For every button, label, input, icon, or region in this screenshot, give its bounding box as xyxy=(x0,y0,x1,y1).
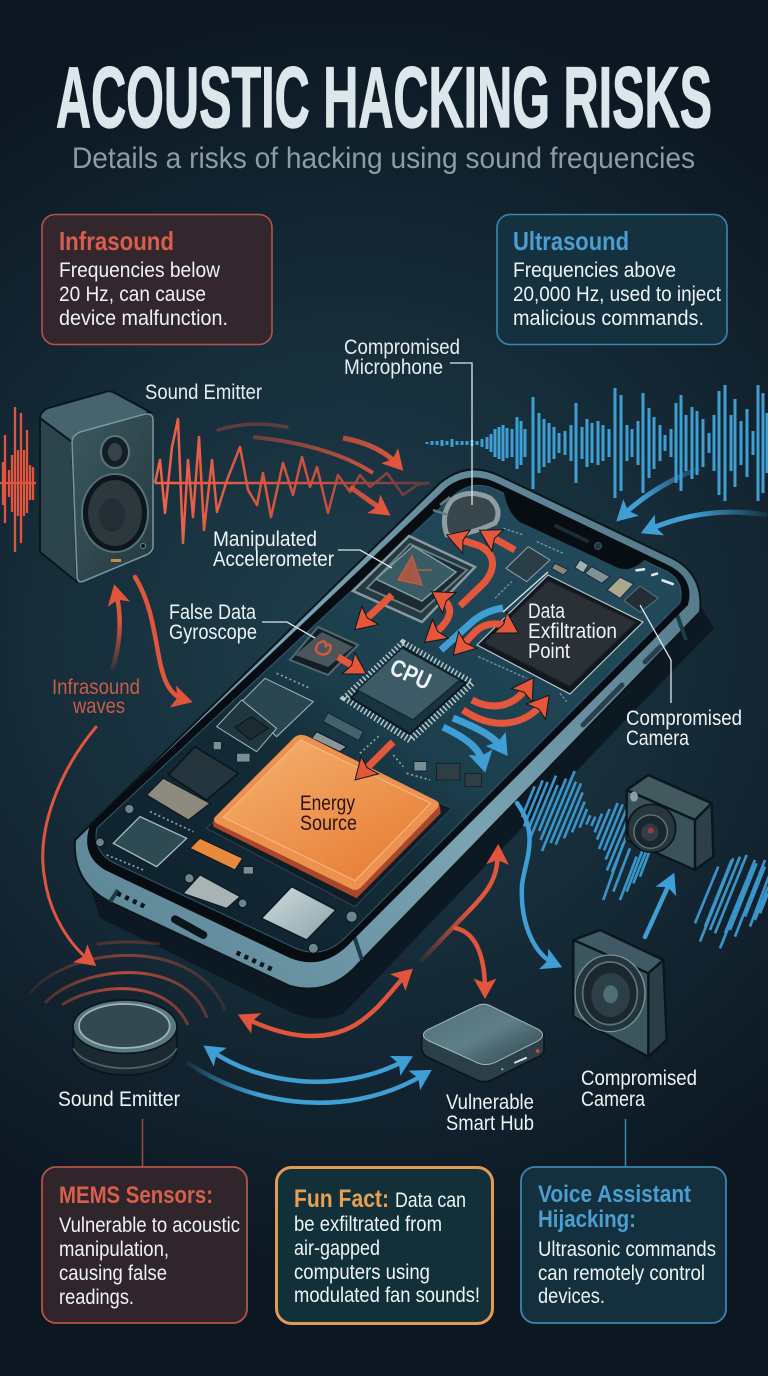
label: sound emitter puck: Sound Emitter xyxy=(58,1087,180,1111)
small chip xyxy=(506,547,550,582)
fun fact text xyxy=(294,1188,480,1307)
manipulated accelerometer chip xyxy=(353,536,475,622)
label: vulnerable smart hub xyxy=(446,1090,534,1135)
data exfiltration label: Point xyxy=(528,639,570,663)
subtitle: Details a risks of hacking using sound frequencies xyxy=(72,142,695,175)
module with chip xyxy=(217,700,277,752)
fun fact heading: Fun Fact: xyxy=(294,1185,389,1213)
side band notches xyxy=(110,612,686,960)
upper module xyxy=(240,678,313,737)
label: compromised camera on phone xyxy=(626,605,742,750)
data exfiltration label: Data xyxy=(528,599,565,623)
traces xyxy=(478,528,567,702)
data exfiltration label xyxy=(528,599,617,663)
label: compromised microphone xyxy=(344,335,472,505)
speaker top and side xyxy=(40,391,150,442)
panel: infrasound xyxy=(42,214,272,344)
infrasound waves label: waves xyxy=(72,695,125,718)
voice assistant heading: Voice Assistant xyxy=(538,1181,691,1208)
label: compromised microphone: Compromised xyxy=(344,335,460,359)
label: manipulated accelerometer xyxy=(213,527,392,571)
volume buttons xyxy=(583,647,660,725)
mems text: causing false xyxy=(59,1261,167,1285)
orange chip xyxy=(190,838,243,870)
energy source label xyxy=(300,791,357,835)
notch xyxy=(503,486,648,569)
speaker front xyxy=(72,414,153,582)
phone metal body xyxy=(75,469,700,989)
earpiece and front camera xyxy=(556,526,602,550)
label: false data gyroscope: False Data xyxy=(169,600,256,624)
camera module xyxy=(624,586,658,612)
battery socket xyxy=(207,740,452,907)
mems heading: MEMS Sensors: xyxy=(59,1182,213,1209)
infrasound heading: Infrasound xyxy=(59,226,174,256)
traces xyxy=(107,673,430,870)
label: compromised microphone: Microphone xyxy=(344,355,443,379)
energy source label: Source xyxy=(300,811,357,835)
infrasound text xyxy=(59,258,228,330)
silver plate xyxy=(147,778,210,820)
infrasound text: device malfunction. xyxy=(59,306,228,330)
connector: red xyxy=(142,1119,144,1167)
label: compromised camera lower: Compromised xyxy=(581,1066,697,1090)
microphone xyxy=(433,493,498,536)
speaker led xyxy=(111,559,121,562)
speaker wave arrows xyxy=(112,577,185,700)
usb port xyxy=(175,919,203,935)
infrasound waves label: Infrasound xyxy=(52,676,140,699)
lower-left components xyxy=(96,673,482,970)
label: vulnerable smart hub: Smart Hub xyxy=(446,1111,534,1135)
mems text: Vulnerable to acoustic xyxy=(59,1213,240,1237)
ultrasound text: Frequencies above xyxy=(513,258,676,282)
mems text: readings. xyxy=(59,1285,134,1309)
screws xyxy=(96,804,357,953)
red wave center line xyxy=(155,482,430,484)
label: sound emitter top: Sound Emitter xyxy=(145,380,262,404)
infrasound text: Frequencies below xyxy=(59,258,220,282)
arrows around hub xyxy=(187,803,671,1103)
label: compromised camera on phone: Camera xyxy=(626,726,689,750)
status icons xyxy=(637,569,673,584)
label: vulnerable smart hub: Vulnerable xyxy=(446,1090,534,1114)
energy source label: Energy xyxy=(300,791,355,815)
fun fact text: Data can xyxy=(395,1188,466,1212)
top connector xyxy=(312,732,347,752)
icon: smart hub xyxy=(422,1004,544,1082)
blue sound wave top right xyxy=(427,385,767,501)
small parts xyxy=(552,563,568,575)
woofer xyxy=(82,474,148,552)
voice assistant heading xyxy=(538,1181,691,1233)
panel: ultrasound xyxy=(497,214,727,344)
fun fact text: computers using xyxy=(294,1260,430,1284)
red arrows toward phone xyxy=(218,424,398,511)
panel: fun fact xyxy=(276,1168,492,1324)
label: manipulated accelerometer: Accelerometer xyxy=(213,547,334,571)
speaker left side xyxy=(40,418,77,582)
mems text: manipulation, xyxy=(59,1237,169,1261)
icon: puck emitter xyxy=(73,1000,177,1075)
white tile xyxy=(262,887,336,940)
circuit board xyxy=(96,485,681,952)
long infrasound arrow xyxy=(43,727,96,961)
voice assistant text: devices. xyxy=(538,1284,605,1308)
fun fact text: be exfiltrated from xyxy=(294,1212,442,1236)
fun fact text: modulated fan sounds! xyxy=(294,1283,480,1307)
label: false data gyroscope: Gyroscope xyxy=(169,620,257,644)
ultrasound text xyxy=(513,258,721,330)
accelerometer icon xyxy=(398,556,432,585)
internal arrows xyxy=(338,535,543,773)
gyroscope icon xyxy=(316,641,330,654)
dark plate xyxy=(168,747,238,800)
mems text xyxy=(59,1213,240,1309)
phone xyxy=(75,469,700,989)
blue arrows toward phone xyxy=(622,468,767,530)
tweeter xyxy=(101,436,129,468)
infrasound text: 20 Hz, can cause xyxy=(59,282,206,306)
ripples around puck xyxy=(30,942,225,1025)
red sound wave left of speaker xyxy=(0,407,36,552)
voice assistant text: Ultrasonic commands xyxy=(538,1237,716,1261)
ultrasound text: malicious commands. xyxy=(513,306,704,330)
ultrasound text: 20,000 Hz, used to inject xyxy=(513,282,721,306)
connector: blue xyxy=(624,1119,626,1167)
speaker holes xyxy=(117,893,273,970)
voice assistant heading: Hijacking: xyxy=(538,1206,636,1233)
false data gyroscope chip xyxy=(290,627,358,675)
cpu label: CPU xyxy=(386,654,435,696)
battery top xyxy=(214,735,439,890)
top board components xyxy=(478,528,673,702)
label: compromised camera lower: Camera xyxy=(581,1087,645,1111)
ultrasound heading: Ultrasound xyxy=(513,226,629,256)
data exfiltration point xyxy=(477,575,643,694)
infrasound waves label xyxy=(52,676,140,718)
icon: speaker xyxy=(40,391,153,582)
black bezel xyxy=(87,477,689,962)
phone shadow xyxy=(85,600,714,1019)
icon: compromised camera speaker xyxy=(573,930,667,1057)
label: compromised camera on phone: Compromised xyxy=(626,706,742,730)
voice assistant text: can remotely control xyxy=(538,1261,705,1285)
panel: voice assistant hijacking xyxy=(521,1167,726,1323)
battery side xyxy=(213,805,441,898)
label: false data gyroscope xyxy=(169,600,315,644)
fun fact text: air-gapped xyxy=(294,1236,380,1260)
panel: mems sensors xyxy=(42,1167,247,1323)
exfiltration leader xyxy=(503,572,548,612)
label: compromised camera lower xyxy=(581,1066,697,1111)
red wave trace xyxy=(155,419,430,543)
cpu chip xyxy=(345,643,472,740)
data exfiltration label: Exfiltration xyxy=(528,619,617,643)
silver connector xyxy=(183,875,240,908)
small parts xyxy=(213,713,482,874)
icon: camera xyxy=(627,775,713,870)
teal tile xyxy=(113,817,187,867)
voice assistant text xyxy=(538,1237,716,1308)
blue sound wave lower right xyxy=(522,771,768,948)
label: manipulated accelerometer: Manipulated xyxy=(213,527,317,551)
